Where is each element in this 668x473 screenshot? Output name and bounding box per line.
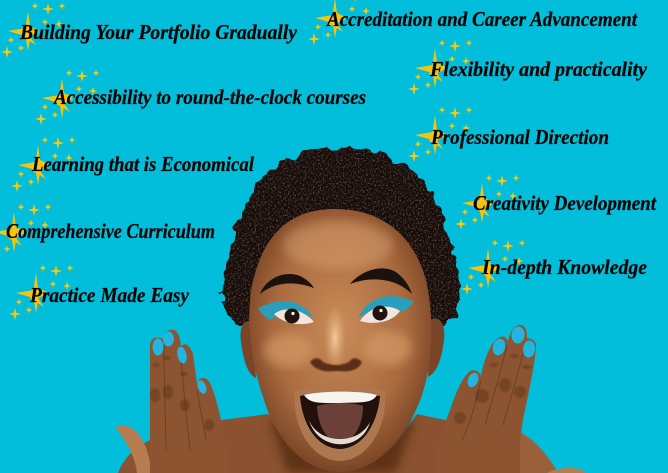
portrait: woman's head: [222, 148, 460, 472]
knuckles: [150, 356, 214, 431]
ears: [240, 318, 444, 378]
fingernails: [152, 332, 208, 395]
fingernails: [466, 326, 536, 389]
left eye: [274, 308, 314, 324]
item: Learning that is Economical: [11, 137, 254, 192]
shoulders: [118, 414, 558, 473]
right eyebrow: [350, 268, 412, 294]
item: Building Your Portfolio Gradually: [1, 3, 298, 58]
knuckles: [454, 354, 532, 424]
item: Building Your Portfolio Gradually: Building Your Portfolio Gradually: [19, 20, 298, 44]
lower thumb: [547, 468, 586, 473]
item: Professional Direction: [408, 107, 609, 162]
nose: [310, 304, 362, 372]
item: Flexibility and practicality: [408, 40, 648, 95]
item: Practice Made Easy: Practice Made Easy: [29, 283, 190, 307]
cheek light: [264, 331, 412, 367]
item: Comprehensive Curriculum: [0, 204, 215, 259]
left eyebrow: [260, 274, 314, 294]
item: In-depth Knowledge: In-depth Knowledge: [481, 255, 647, 279]
left hand: [116, 330, 230, 473]
finger shading: [462, 345, 525, 440]
hair: [222, 148, 460, 328]
item: Accessibility to round-the-clock courses: Accessibility to round-the-clock courses: [52, 85, 366, 109]
thumb: [116, 425, 152, 473]
face: [249, 209, 431, 472]
item: In-depth Knowledge: [461, 240, 647, 295]
item: Flexibility and practicality: Flexibility and practicality: [429, 57, 648, 81]
item: Learning that is Economical: Learning that is Economical: [31, 152, 254, 176]
right eye shadow: [358, 296, 414, 318]
item: Accreditation and Career Advancement: [308, 0, 638, 45]
palm and fingers: [150, 330, 230, 473]
item: Accreditation and Career Advancement: Accreditation and Career Advancement: [325, 7, 638, 31]
item: Comprehensive Curriculum: Comprehensive Curriculum: [6, 219, 215, 243]
right hand: [435, 325, 586, 473]
right eye: [360, 306, 400, 323]
left eye shadow: [258, 301, 314, 320]
mouth: [295, 388, 385, 461]
finger shading: [164, 345, 206, 450]
item: Creativity Development: [455, 175, 657, 230]
item: Professional Direction: Professional Direction: [430, 125, 609, 149]
item: Accessibility to round-the-clock courses: [35, 70, 366, 125]
item: Practice Made Easy: [9, 265, 190, 320]
palm and fingers: [435, 325, 536, 473]
forehead light: [283, 221, 393, 269]
